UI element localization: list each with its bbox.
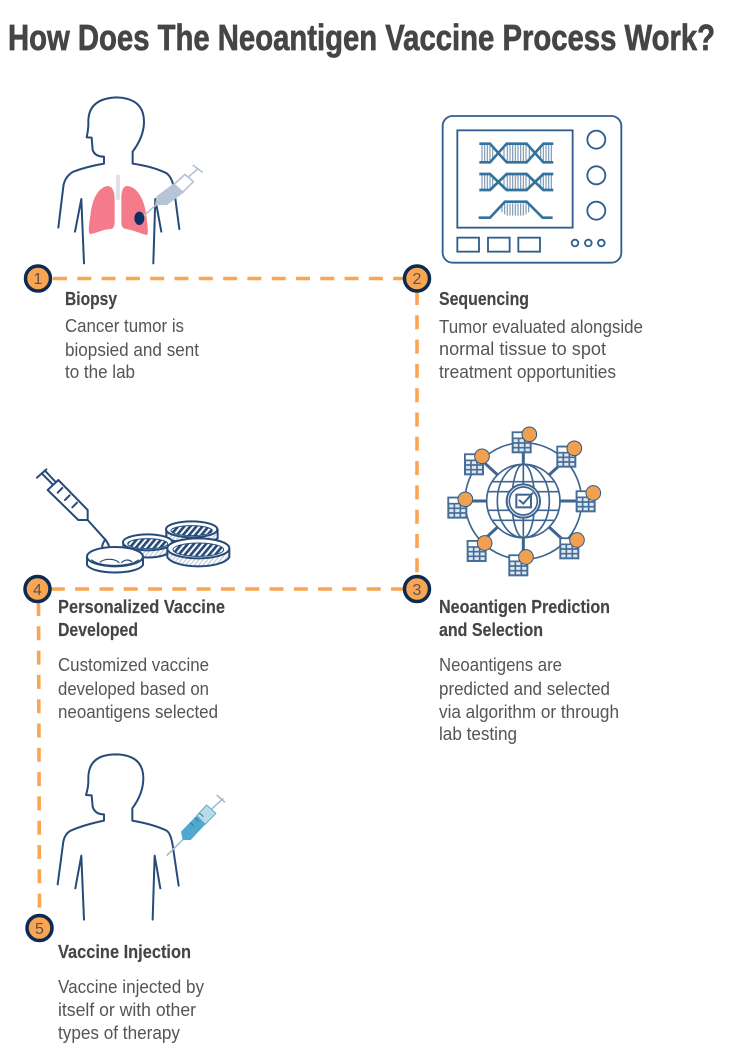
text block: sequencing: normal tissue to spot <box>439 338 606 359</box>
text block: sequencing: treatment opportunities <box>439 361 616 382</box>
step 3 marker: 3 <box>413 582 422 599</box>
step 2 marker <box>404 266 430 291</box>
text block: personalized vaccine developed: Customized vaccine <box>58 654 209 675</box>
step 4 marker <box>25 576 50 602</box>
text block: vaccine injection: types of therapy <box>58 1022 181 1043</box>
text block: sequencing <box>439 288 643 382</box>
step 1 marker <box>26 266 50 291</box>
text block: neoantigen prediction and selection: via algorithm or through <box>439 701 619 722</box>
text block: biopsy: Biopsy <box>65 288 118 309</box>
text block: neoantigen prediction and selection: and Selection <box>439 619 543 640</box>
step 4 marker: 4 <box>33 582 42 599</box>
icon: injection torso with blue syringe <box>58 754 225 920</box>
petri dish back right <box>166 521 218 542</box>
text block: biopsy <box>65 288 199 382</box>
petri dish front right <box>167 538 229 566</box>
icon: neoantigen network globe <box>448 427 601 575</box>
text block: neoantigen prediction and selection <box>439 596 619 744</box>
step 5 marker: 5 <box>35 921 44 938</box>
text block: biopsy: Cancer tumor is <box>65 315 184 336</box>
step 2 marker: 2 <box>413 271 422 288</box>
text block: vaccine injection: Vaccine Injection <box>58 941 191 962</box>
text block: neoantigen prediction and selection: Neoantigens are <box>439 654 562 675</box>
text block: biopsy: biopsied and sent <box>65 339 199 360</box>
icon: syringe over petri dishes <box>37 469 229 572</box>
text block: vaccine injection: itself or with other <box>58 999 196 1020</box>
text block: neoantigen prediction and selection: Neoantigen Prediction <box>439 596 610 617</box>
step 5 marker <box>27 916 52 940</box>
icon: sequencing machine with DNA <box>443 116 621 263</box>
petri dish with drop <box>87 547 143 572</box>
text block: neoantigen prediction and selection: lab testing <box>439 723 517 744</box>
icon: biopsy torso with lungs and syringe <box>58 97 203 263</box>
step 1 marker: 1 <box>34 271 43 288</box>
text block: vaccine injection <box>58 941 205 1043</box>
text block: vaccine injection: Vaccine injected by <box>58 976 205 997</box>
petri dish middle <box>123 534 172 557</box>
text block: personalized vaccine developed: developed based on <box>58 678 209 699</box>
text block: sequencing: Tumor evaluated alongside <box>439 316 643 337</box>
text block: neoantigen prediction and selection: predicted and selected <box>439 678 610 699</box>
text block: personalized vaccine developed <box>58 596 225 722</box>
text block: sequencing: Sequencing <box>439 288 529 309</box>
text block: personalized vaccine developed: Developed <box>58 619 138 640</box>
text block: personalized vaccine developed: neoantigens selected <box>58 701 218 722</box>
text block: biopsy: to the lab <box>65 361 135 382</box>
text block: personalized vaccine developed: Personalized Vaccine <box>58 596 225 617</box>
dashed process connector <box>38 278 417 916</box>
step 3 marker <box>404 576 430 602</box>
